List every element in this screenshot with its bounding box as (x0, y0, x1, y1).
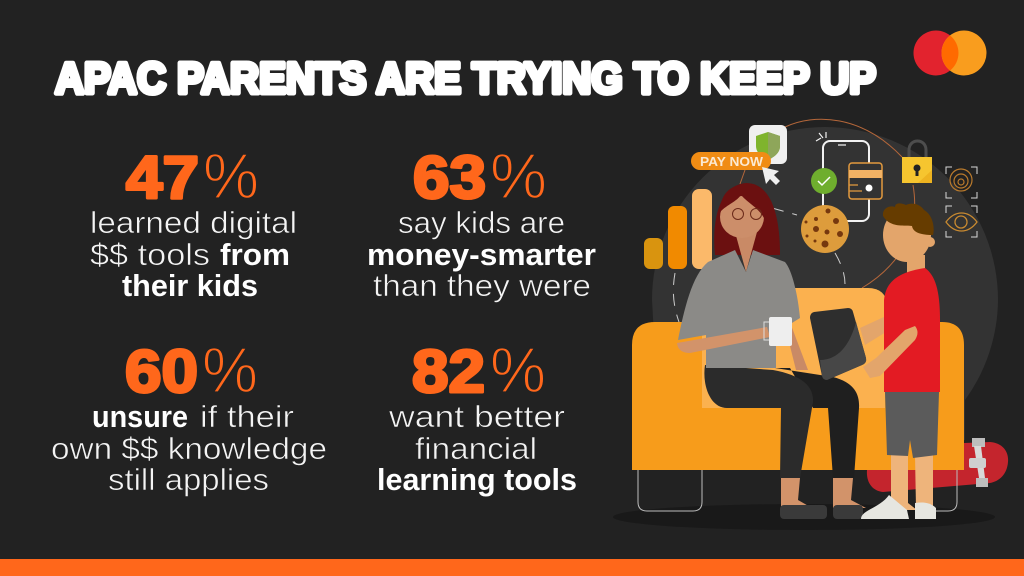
stat: 63%: % (490, 140, 547, 212)
back leg (775, 368, 859, 478)
skateboard (867, 438, 1008, 492)
mug (764, 317, 792, 346)
stat: 63%: money-smarter (367, 237, 596, 272)
stat: 60% (51, 334, 327, 497)
glasses (732, 208, 762, 220)
stat: 63%: 63 (413, 144, 486, 211)
stat: 63% (367, 140, 596, 303)
shirt (884, 268, 940, 392)
hair (883, 203, 934, 235)
sofa legs (638, 470, 957, 511)
shoes (780, 505, 827, 519)
stat: 47%: % (203, 140, 259, 212)
icon: credit card (849, 163, 882, 199)
sofa body (632, 322, 964, 470)
logo: overlapping circles (914, 30, 986, 76)
stat: 82%: want better (388, 399, 565, 434)
illustration: parent and child with digital icons (613, 119, 1008, 530)
icon: cursor arrow (762, 167, 780, 185)
dashed connectors (673, 208, 845, 322)
stat: 47%: 47 (126, 144, 199, 211)
hair fringe (720, 184, 767, 222)
front leg (704, 365, 813, 478)
ear (925, 237, 935, 247)
stat: 63%: say kids are (398, 205, 565, 240)
stat: 47%: their kids (122, 268, 258, 303)
head (883, 208, 931, 262)
bottom bar (0, 559, 1024, 576)
stat: 60%: unsure (92, 399, 188, 434)
icon: phone (816, 132, 869, 221)
woman (677, 183, 866, 519)
feet (781, 478, 812, 508)
boy (810, 203, 940, 519)
shorts (885, 392, 939, 458)
icon: check badge (811, 168, 837, 194)
icon: shield card (749, 125, 787, 164)
icon: eye scan (946, 206, 977, 237)
stat: 47%: from (220, 237, 290, 272)
arm (863, 326, 918, 378)
stat: 82%: financial (415, 431, 537, 466)
hair (714, 183, 780, 255)
icon: pay now button (691, 152, 771, 170)
stat: 60%: still applies (108, 462, 269, 497)
stat: 60%: if their (200, 399, 294, 434)
icon: pay now button: PAY NOW (700, 154, 764, 169)
legs (891, 455, 917, 510)
stat: 47% (90, 140, 297, 303)
floor shadow (613, 504, 995, 530)
far arm (786, 325, 808, 370)
stat: 82%: 82 (412, 338, 485, 405)
icon: fingerprint scan (946, 167, 977, 198)
bar chart icon (644, 189, 712, 269)
arm (677, 327, 770, 353)
icon: padlock (902, 141, 932, 183)
background circle (652, 127, 998, 440)
stat: 63%: than they were (373, 268, 591, 303)
stat: 60%: own $$ knowledge (51, 431, 327, 466)
stat: 82% (377, 334, 577, 497)
sofa back (702, 288, 888, 408)
torso and sleeve (678, 250, 800, 368)
neck (907, 255, 925, 275)
stat: 47%: learned digital (90, 205, 297, 240)
orbit ring (740, 119, 915, 288)
stat: 60%: % (202, 334, 258, 406)
icon: cookie (801, 205, 849, 253)
stat: 82%: learning tools (377, 462, 577, 497)
stat: 82%: % (490, 334, 546, 406)
face (720, 196, 764, 238)
shoes (861, 495, 909, 519)
back arm (860, 316, 886, 345)
stat: 47%: $$ tools (90, 237, 210, 272)
title: APAC PARENTS ARE TRYING TO KEEP UP (55, 54, 876, 103)
stat: 60%: 60 (125, 338, 198, 405)
tablet (810, 308, 866, 380)
neck (735, 232, 757, 272)
